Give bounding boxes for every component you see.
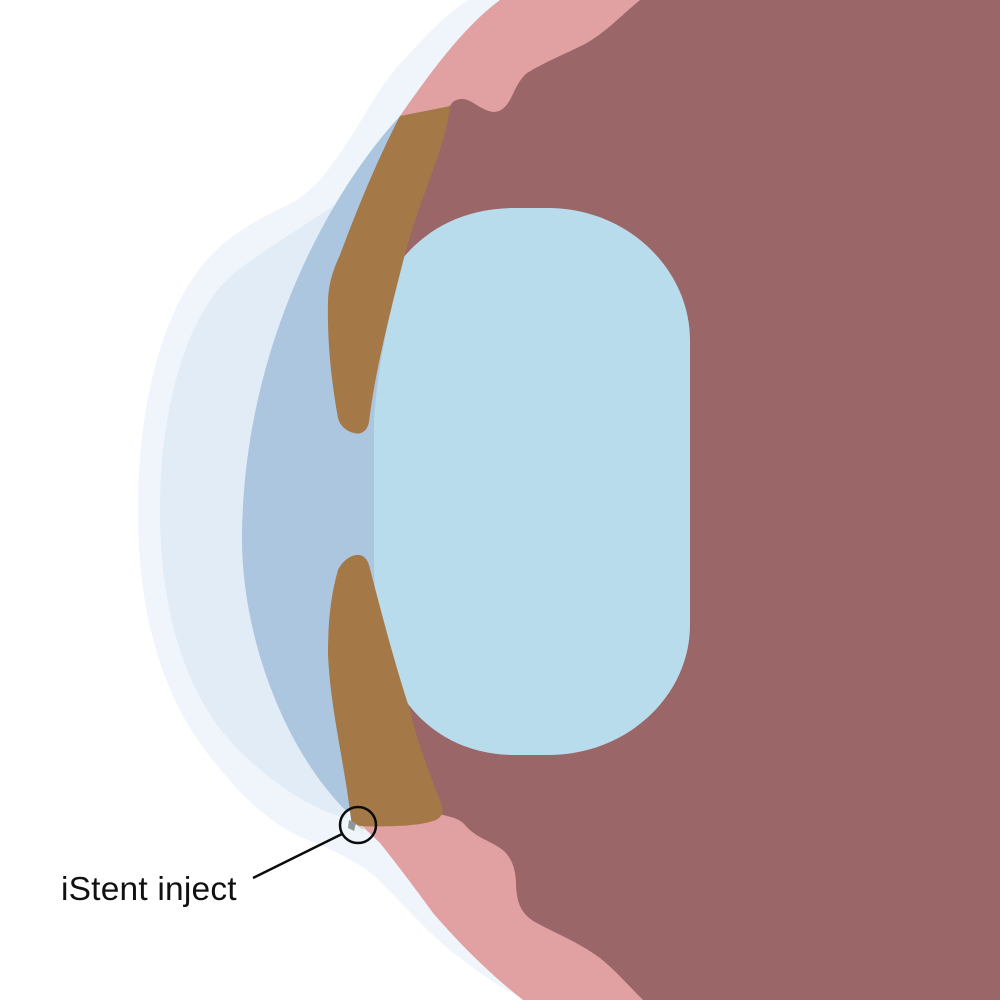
maroon eye interior [395,0,1000,1000]
icon: iStent implant [348,820,365,835]
cornea [242,110,420,812]
label: iStent inject [61,871,237,908]
aqueous humour behind the pupil [330,420,376,580]
upper iris [328,106,450,434]
leader line [253,834,342,878]
lower pink sclera [362,810,643,1000]
lower iris [328,555,443,826]
inner pale layer [160,200,400,818]
upper pink sclera [400,0,640,116]
outer pale tear film layer [138,0,700,1000]
lens [374,208,690,755]
callout circle [340,807,376,843]
